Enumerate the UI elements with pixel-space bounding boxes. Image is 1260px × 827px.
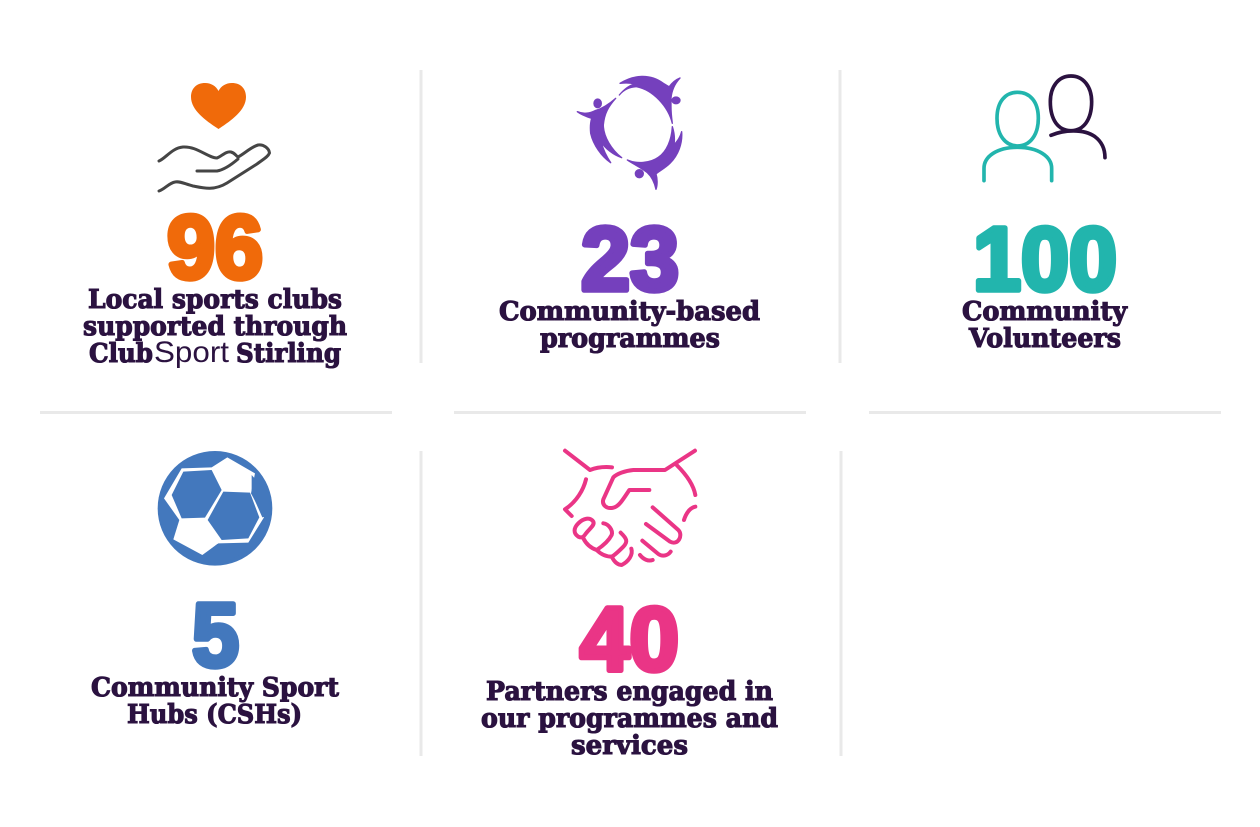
number: 100: 100 [973, 210, 1117, 310]
label: community volunteers [962, 297, 1128, 354]
label: community-based programmes [499, 297, 760, 354]
label: community volunteers: Community [962, 297, 1128, 327]
label: local sports clubs: Stirling [236, 339, 341, 369]
label: local sports clubs [83, 285, 347, 369]
panel: community volunteers [962, 76, 1128, 354]
number: 23: 23 [581, 210, 679, 310]
label: local sports clubs: Local sports clubs [88, 285, 342, 315]
icon: football [158, 451, 272, 566]
icon: two people [984, 76, 1105, 181]
label: community volunteers: Volunteers [968, 324, 1121, 354]
label: partners engaged [481, 677, 778, 761]
label: community-based programmes: programmes [540, 324, 720, 354]
icon: handshake [565, 451, 695, 565]
label: community sport hubs [91, 673, 339, 730]
label: partners engaged: Partners engaged in [486, 677, 773, 707]
label: community sport hubs: Community Sport [91, 673, 339, 703]
number: 5: 5 [192, 586, 239, 686]
label: community sport hubs: Hubs (CSHs) [127, 700, 302, 730]
number: 40: 40 [580, 590, 679, 690]
number: 96: 96 [167, 198, 263, 298]
label: local sports clubs: supported through [83, 312, 347, 342]
label: local sports clubs: Sport [154, 336, 230, 369]
icon: circle of figures [577, 76, 682, 189]
label: partners engaged: our programmes and [481, 704, 778, 734]
label: community-based programmes: Community-based [499, 297, 760, 327]
label: local sports clubs: Club [89, 339, 153, 369]
panel: community sport hubs [91, 451, 339, 730]
panel: community programmes [499, 76, 760, 354]
panel: sports clubs [83, 83, 347, 369]
panel: partners [481, 451, 778, 761]
label: partners engaged: services [571, 731, 688, 761]
icon: heart over open hand [159, 83, 270, 191]
